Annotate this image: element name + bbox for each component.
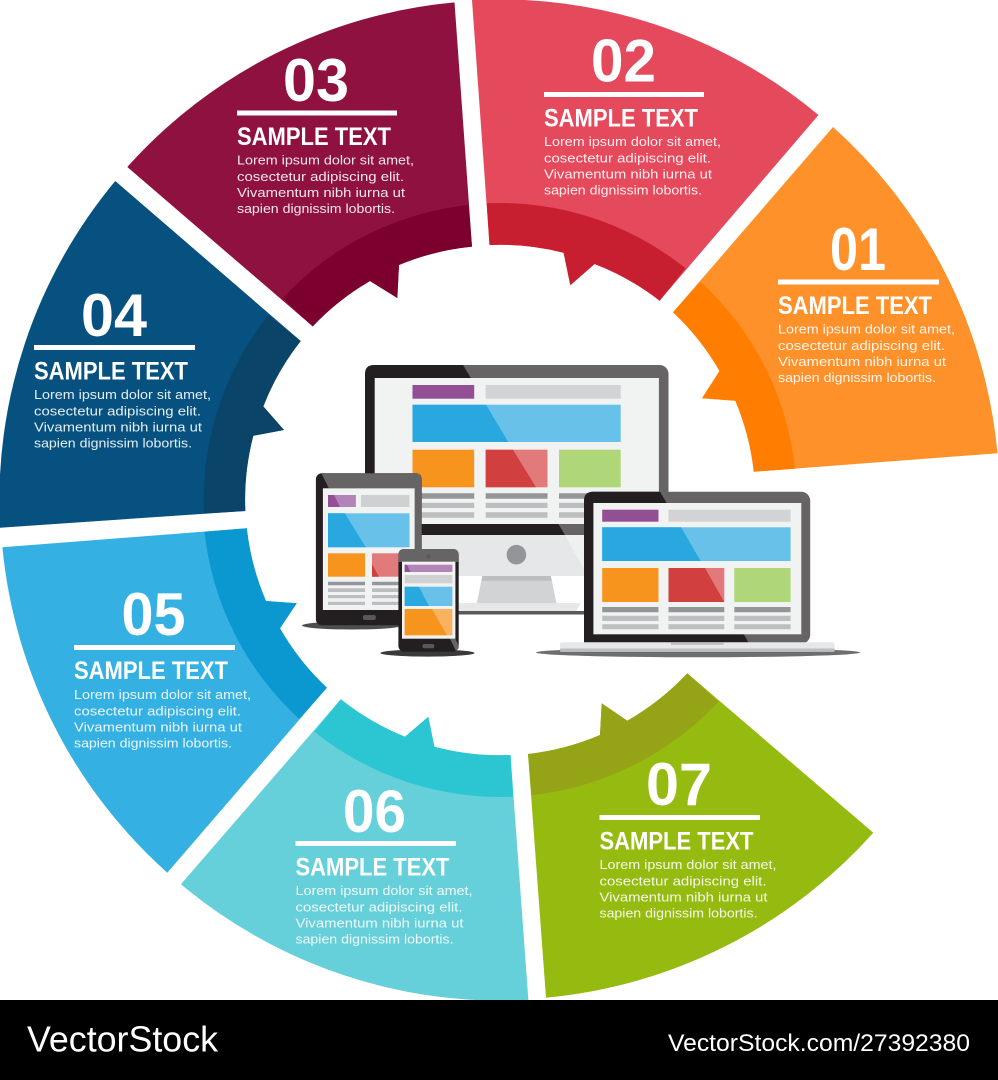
text block 07 [600, 857, 776, 920]
footer logo: VectorStock [27, 1018, 219, 1060]
text block 05: Lorem ipsum dolor sit amet, [74, 687, 251, 702]
rule 05 [74, 645, 235, 650]
text block 01: cosectetur adipiscing elit. [778, 338, 945, 353]
panel: segment 03 maroon [127, 2, 472, 326]
text block 02: Lorem ipsum dolor sit amet, [544, 134, 721, 149]
icon: tablet [302, 473, 422, 630]
text block 06: cosectetur adipiscing elit. [296, 899, 462, 914]
text block 03: sapien dignissim lobortis. [237, 201, 395, 216]
text block 02: cosectetur adipiscing elit. [544, 150, 711, 165]
text block 02 [544, 134, 721, 197]
icon: smartphone [380, 549, 474, 657]
heading 01: SAMPLE TEXT [778, 292, 932, 320]
text block 04: sapien dignissim lobortis. [34, 435, 192, 450]
text block 03 [237, 152, 414, 216]
heading 04: SAMPLE TEXT [34, 358, 188, 386]
icon: laptop [536, 492, 860, 657]
panel: segment 04 navy [0, 181, 301, 528]
text block 03: Lorem ipsum dolor sit amet, [237, 152, 414, 168]
footer bar [0, 1000, 998, 1080]
text block 06: sapien dignissim lobortis. [296, 931, 454, 946]
text block 05 [74, 687, 251, 750]
footer url: VectorStock.com/27392380 [668, 1030, 970, 1057]
text block 04: Vivamentum nibh iurna ut [34, 419, 202, 434]
panel: segment 02 red [472, 0, 818, 301]
text block 04 [34, 387, 211, 450]
text block 06 [296, 883, 472, 946]
text block 03: Vivamentum nibh iurna ut [237, 185, 405, 200]
heading 02: SAMPLE TEXT [544, 104, 698, 132]
text block 05: cosectetur adipiscing elit. [74, 703, 241, 718]
heading 07: SAMPLE TEXT [600, 828, 754, 856]
number 07: 07 [646, 751, 712, 818]
number 01: 01 [830, 216, 886, 283]
text block 01: Lorem ipsum dolor sit amet, [778, 322, 955, 336]
rule 01 [778, 280, 939, 284]
text block 06: Lorem ipsum dolor sit amet, [296, 883, 472, 898]
number 03: 03 [283, 47, 349, 114]
rule 07 [600, 815, 760, 820]
panel: segment 05 blue [2, 528, 327, 873]
text block 06: Vivamentum nibh iurna ut [296, 915, 464, 930]
text block 05: Vivamentum nibh iurna ut [74, 719, 242, 734]
text block 07: sapien dignissim lobortis. [600, 905, 758, 920]
rule 03 [237, 110, 397, 116]
panel: segment 06 teal [181, 699, 528, 1001]
heading 05: SAMPLE TEXT [74, 657, 228, 685]
text block 07: cosectetur adipiscing elit. [600, 873, 766, 888]
icon: desktop monitor [365, 365, 668, 614]
number 06: 06 [343, 778, 406, 845]
text block 04: cosectetur adipiscing elit. [34, 403, 201, 418]
text block 01: Vivamentum nibh iurna ut [778, 354, 946, 369]
heading 03: SAMPLE TEXT [237, 123, 391, 151]
text block 07: Lorem ipsum dolor sit amet, [600, 857, 776, 872]
panel: segment 07 green [528, 673, 873, 998]
text block 01: sapien dignissim lobortis. [778, 370, 936, 385]
text block 07: Vivamentum nibh iurna ut [600, 889, 768, 904]
text block 01 [778, 322, 955, 385]
text block 02: sapien dignissim lobortis. [544, 182, 702, 197]
rule 04 [34, 345, 195, 350]
text block 05: sapien dignissim lobortis. [74, 735, 232, 750]
heading 06: SAMPLE TEXT [296, 854, 450, 882]
text block 03: cosectetur adipiscing elit. [237, 169, 404, 184]
number 02: 02 [591, 28, 656, 94]
panel: segment 01 orange [673, 127, 998, 472]
number 04: 04 [81, 282, 148, 349]
rule 02 [544, 92, 704, 97]
text block 02: Vivamentum nibh iurna ut [544, 166, 712, 181]
rule 06 [296, 841, 456, 846]
number 05: 05 [122, 581, 186, 648]
text block 04: Lorem ipsum dolor sit amet, [34, 387, 211, 402]
